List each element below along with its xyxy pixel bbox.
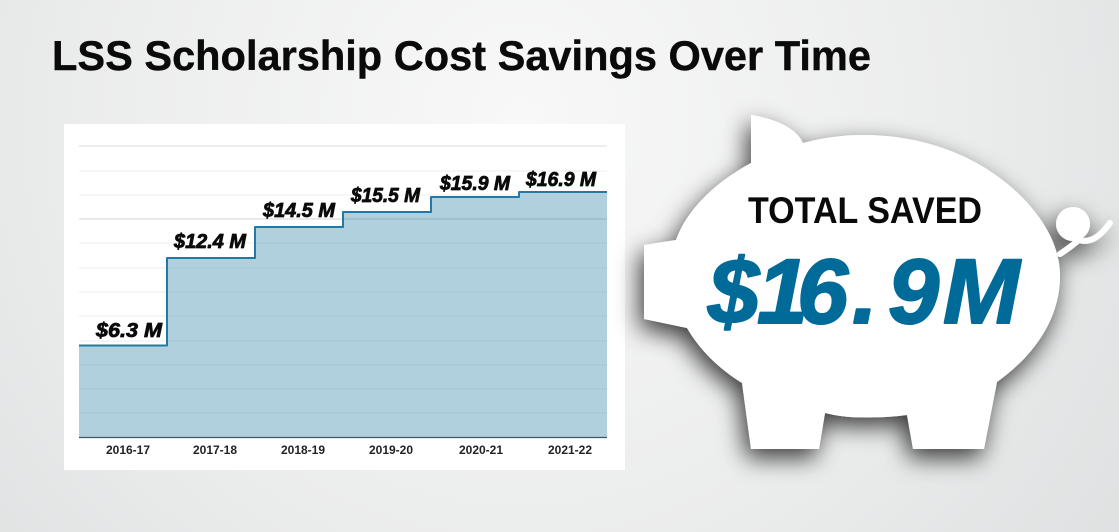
year labels: 2019-20 — [369, 443, 413, 457]
year labels: 2018-19 — [281, 443, 325, 457]
title: LSS Scholarship Cost Savings Over Time — [52, 32, 871, 79]
value labels — [95, 169, 597, 342]
value labels: $14.5 M — [262, 200, 336, 222]
year labels: 2017-18 — [193, 443, 237, 457]
year labels: 2016-17 — [106, 443, 150, 457]
total saved text: TOTAL SAVED — [748, 190, 982, 231]
value labels: $6.3 M — [95, 320, 163, 342]
total amount: $16.9M — [707, 241, 1022, 343]
year labels — [106, 443, 592, 457]
value labels: $12.4 M — [173, 231, 247, 253]
x axis — [79, 436, 607, 438]
value labels: $15.5 M — [350, 185, 421, 207]
year labels: 2020-21 — [459, 443, 503, 457]
value labels: $16.9 M — [525, 169, 597, 191]
value labels: $15.9 M — [439, 173, 511, 195]
icon: piggy bank — [644, 115, 1110, 449]
step line — [79, 192, 607, 346]
panel: step chart — [64, 124, 625, 470]
year labels: 2021-22 — [548, 443, 592, 457]
area series — [79, 192, 607, 437]
